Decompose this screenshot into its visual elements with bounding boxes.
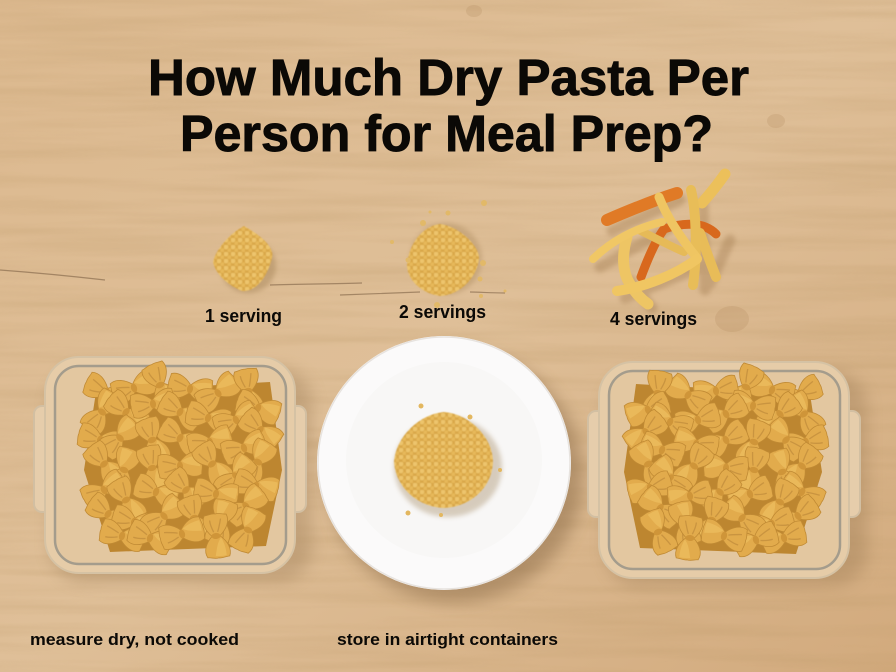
pile: 1 serving of pasta (213, 226, 276, 293)
right glass container with pasta (588, 361, 867, 586)
plate with dry pasta (317, 336, 583, 602)
left glass container with pasta (34, 357, 312, 582)
title (148, 49, 749, 162)
pile: 4 servings of pasta strips (593, 174, 730, 308)
label: 1 serving: 1 serving (205, 305, 282, 326)
pile: 2 servings of pasta (390, 200, 506, 308)
caption: store in airtight containers: store in airtight containers (337, 630, 558, 649)
caption: measure dry, not cooked: measure dry, not cooked (30, 630, 239, 649)
label: 2 servings: 2 servings (399, 301, 486, 322)
title: Person for Meal Prep? (180, 105, 713, 162)
label: 4 servings: 4 servings (610, 308, 697, 329)
title: How Much Dry Pasta Per (148, 49, 749, 106)
